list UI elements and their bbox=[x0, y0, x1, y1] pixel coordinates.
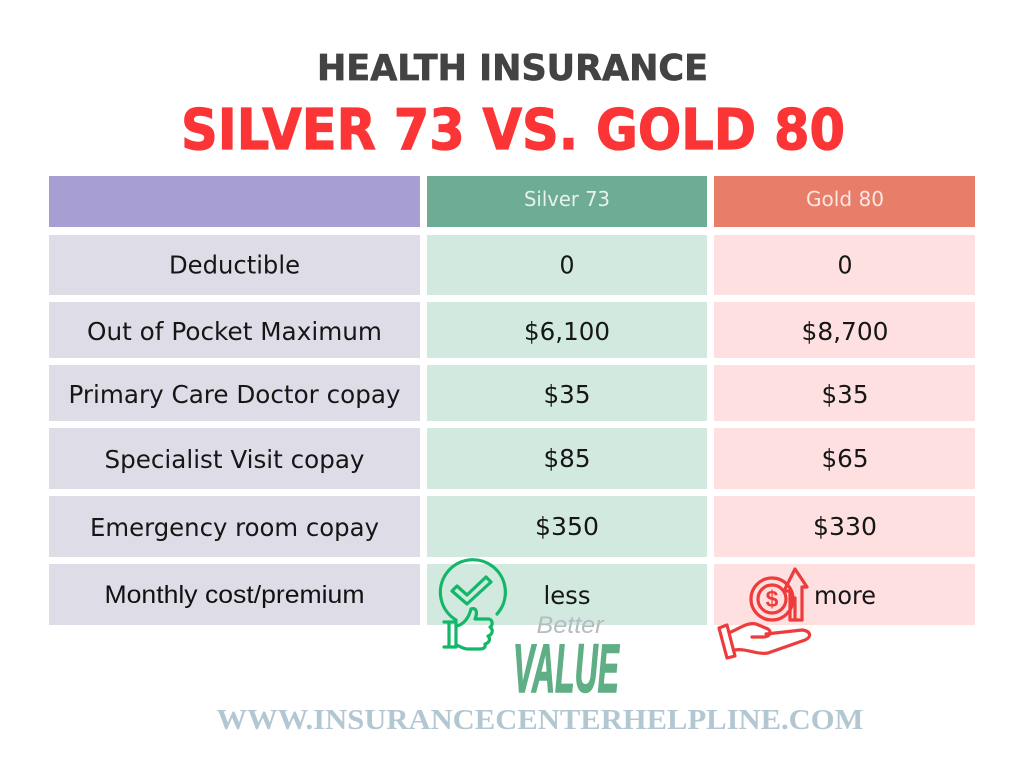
better value label bbox=[513, 612, 620, 707]
text: VALUE bbox=[513, 630, 620, 707]
icon: hand with dollar coin and arrow bbox=[719, 569, 810, 658]
row: out of pocket maximum: Out of Pocket Maximum bbox=[87, 317, 382, 346]
text: better: Better bbox=[536, 612, 605, 639]
row: primary care doctor copay: $35 bbox=[822, 380, 868, 409]
row: deductible: Deductible bbox=[169, 250, 300, 280]
header: silver 73: Silver 73 bbox=[524, 187, 610, 211]
row: emergency room copay: Emergency room copay bbox=[90, 513, 379, 542]
row: primary care doctor copay: $35 bbox=[544, 380, 590, 409]
row: primary care doctor copay: Primary Care Doctor copay bbox=[68, 380, 401, 409]
title: health insurance: HEALTH INSURANCE bbox=[317, 48, 708, 89]
row: out of pocket maximum: $8,700 bbox=[802, 317, 888, 346]
header: gold 80: Gold 80 bbox=[806, 187, 884, 211]
row: emergency room copay: $330 bbox=[813, 512, 877, 541]
row: monthly cost/premium: Monthly cost/premium bbox=[104, 581, 364, 609]
row: emergency room copay bbox=[49, 496, 975, 557]
icon: hand with dollar coin and arrow: $ bbox=[766, 586, 779, 612]
table bbox=[49, 176, 975, 625]
header: silver 73 bbox=[427, 176, 707, 227]
row: monthly cost/premium: less bbox=[544, 581, 590, 610]
row: monthly cost/premium: more bbox=[814, 581, 876, 610]
row: specialist visit copay: $85 bbox=[544, 444, 590, 473]
row: out of pocket maximum: $6,100 bbox=[524, 317, 610, 346]
row: monthly cost/premium bbox=[49, 564, 975, 625]
row: specialist visit copay: Specialist Visit copay bbox=[104, 445, 365, 474]
title: silver 73 vs gold 80: SILVER 73 VS. GOLD 80 bbox=[181, 98, 845, 163]
website url: WWW.INSURANCECENTERHELPLINE.COM bbox=[216, 704, 864, 736]
row: out of pocket maximum bbox=[49, 302, 975, 358]
row: specialist visit copay: $65 bbox=[822, 444, 868, 473]
header: gold 80 bbox=[714, 176, 975, 227]
row: emergency room copay: $350 bbox=[535, 512, 599, 541]
header: blank label cell bbox=[49, 176, 420, 227]
icon: check and thumbs up bbox=[440, 560, 505, 649]
row: deductible: 0 bbox=[838, 250, 852, 280]
row: specialist visit copay bbox=[49, 428, 975, 489]
row: deductible bbox=[49, 235, 975, 295]
row: deductible: 0 bbox=[560, 250, 574, 280]
row: primary care doctor copay bbox=[49, 365, 975, 421]
